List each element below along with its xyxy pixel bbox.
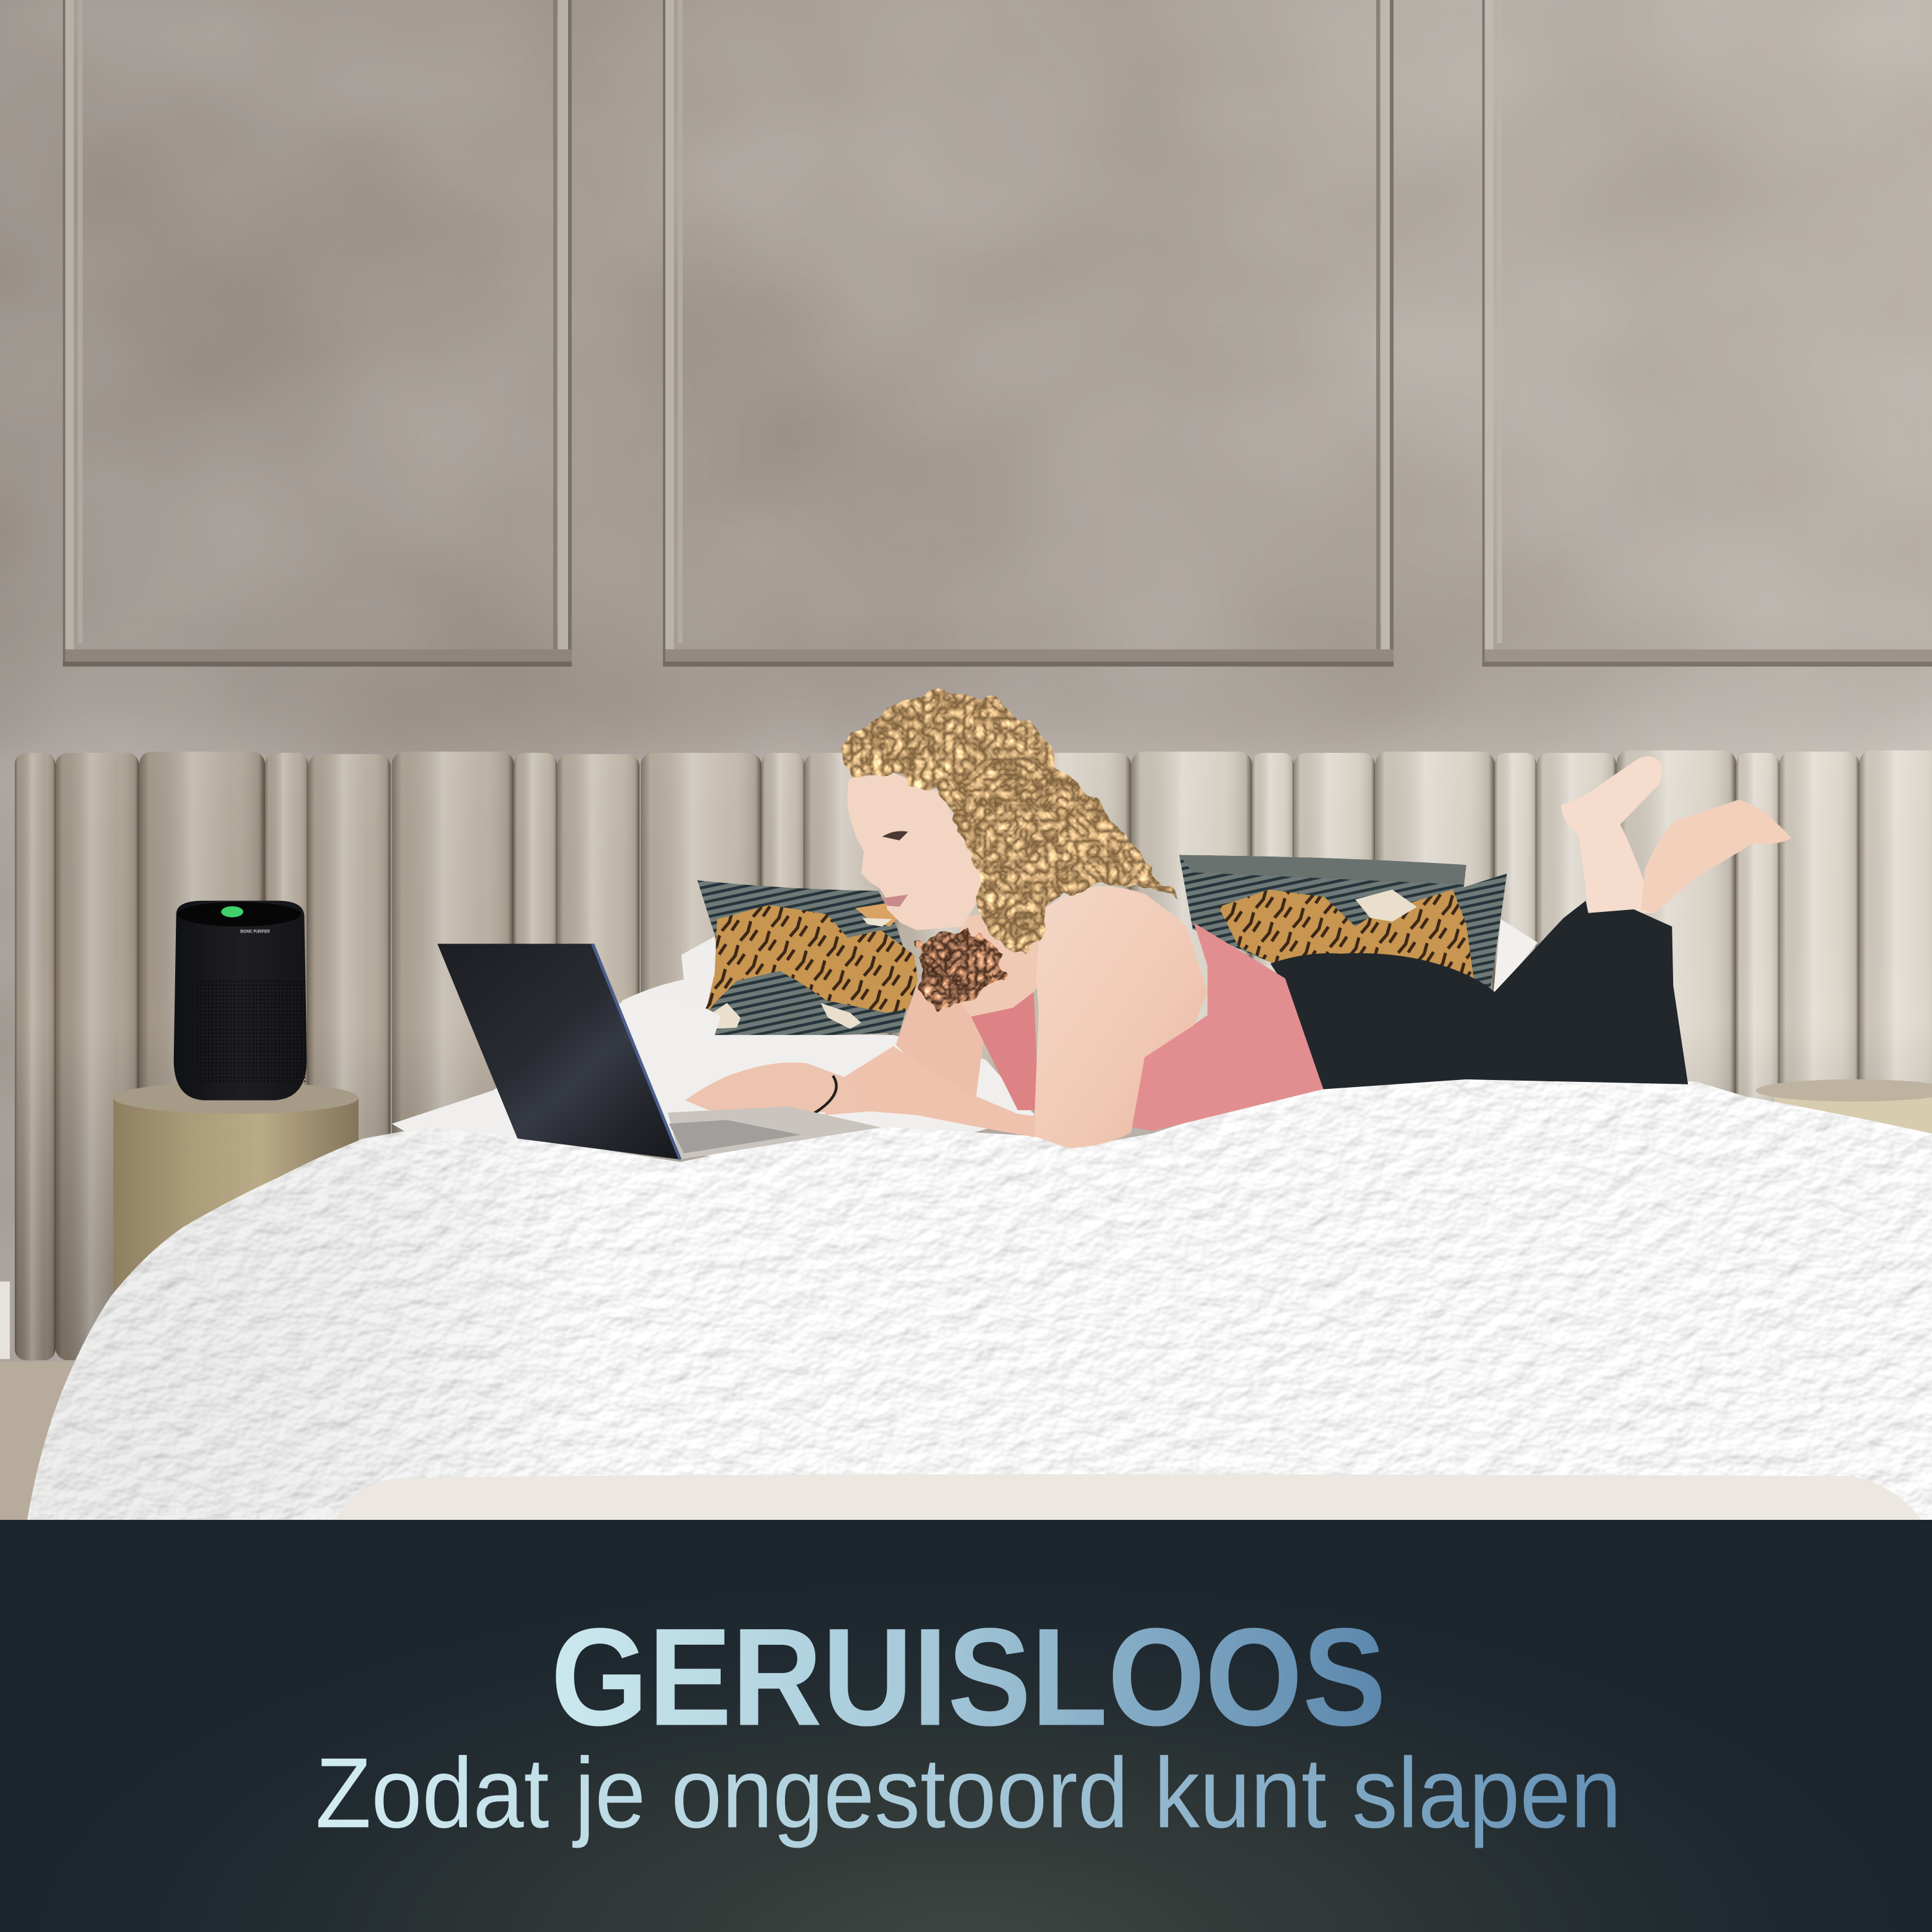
pillow: rear white pillow	[622, 936, 727, 1047]
pink top: front panel	[971, 992, 1039, 1110]
dark lower curls	[918, 929, 1001, 1016]
dehumidifier	[174, 901, 307, 1101]
footboard	[335, 1474, 1922, 1520]
typing hand and wrist	[685, 1063, 862, 1124]
tiger head	[855, 903, 898, 927]
bedspread	[27, 1077, 1932, 1520]
lid edge	[592, 944, 680, 1159]
moulding: left panel	[63, 0, 572, 667]
status light	[221, 906, 243, 917]
subheading: Zodat je ongestoord kunt slapen	[316, 1737, 1622, 1848]
brand text: BIONIC PURIFIER	[240, 928, 270, 934]
pink top: back panel	[1128, 923, 1323, 1131]
keys	[669, 1120, 801, 1153]
near arm and shoulder	[1034, 886, 1208, 1148]
moulding: right panel	[1482, 0, 1932, 667]
grille	[197, 980, 305, 1084]
near forearm	[824, 1046, 1035, 1137]
caption band	[0, 1520, 1932, 1932]
upholstered headboard	[0, 739, 1932, 1368]
face	[848, 773, 986, 931]
far arm	[896, 986, 983, 1099]
eye	[882, 831, 908, 840]
lips	[882, 895, 908, 907]
hair	[843, 693, 1175, 954]
heading: GERUISLOOS	[551, 1599, 1386, 1755]
white pillow on right	[1493, 919, 1538, 993]
far bedding behind person	[392, 996, 1035, 1164]
floor and skirting	[0, 1282, 86, 1520]
laptop	[437, 944, 881, 1159]
side table: right	[1756, 1079, 1932, 1140]
lower leg and foot: raised	[1561, 757, 1662, 913]
pillow: left tiger	[690, 880, 918, 1039]
pillow: right tiger	[1179, 855, 1507, 993]
neck and chest	[949, 900, 1047, 1016]
black trousers	[1271, 901, 1688, 1089]
keyboard deck	[668, 1106, 881, 1159]
woman on bed	[685, 693, 1792, 1148]
tiger paws	[708, 1003, 861, 1029]
side table: left	[113, 1082, 359, 1296]
lower leg and foot: crossed	[1641, 800, 1792, 913]
lid	[437, 944, 680, 1159]
moulding: centre panel	[663, 0, 1394, 667]
wall with moulded panels	[0, 0, 1932, 1520]
bracelet	[813, 1075, 837, 1114]
